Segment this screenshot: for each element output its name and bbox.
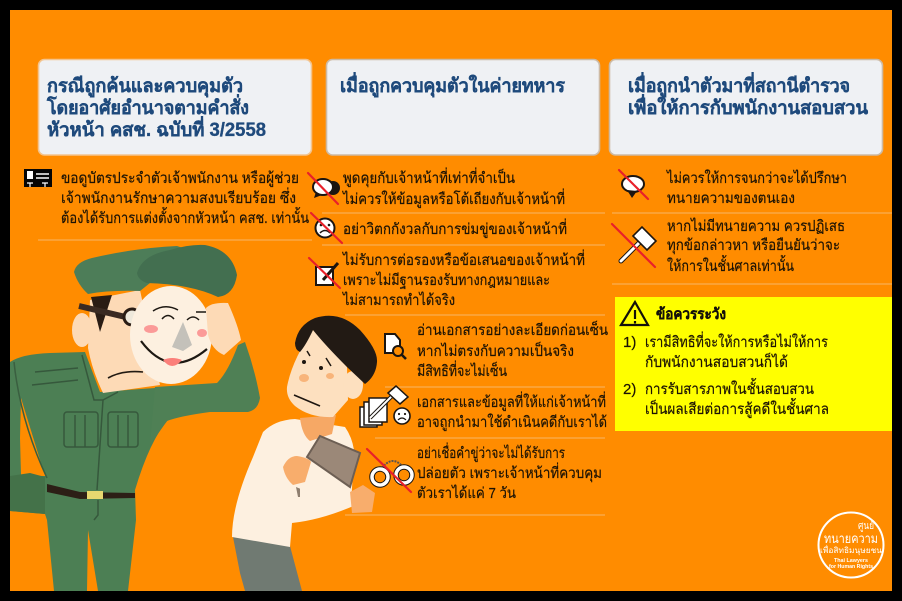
- icon: documents, gavel and sad face: [360, 386, 410, 427]
- text: speak only as necessary: พูดคุยกับเจ้าหน้าที่เท่าที่จำเป็น: [343, 167, 515, 188]
- book: [307, 436, 360, 487]
- caution item one: กับพนักงานสอบสวนก็ได้: [645, 352, 788, 371]
- text: do not worry about threats: อย่าวิตกกังวลกับการข่มขู่ของเจ้าหน้าที่: [343, 218, 567, 238]
- text: no bargaining: เพราะไม่มีฐานรองรับทางกฎหมายและ: [343, 271, 550, 289]
- text: column one item: ขอดูบัตรประจำตัวเจ้าพนักงาน หรือผู้ช่วย: [61, 170, 299, 187]
- text: speak only as necessary: ไม่ควรให้ข้อมูลหรือโต้เถียงกับเจ้าหน้าที่: [342, 188, 565, 208]
- text: do not believe threats of detention: อย่าเชื่อคำขู่ว่าจะไม่ได้รับการ: [417, 442, 565, 462]
- text: do not testify before consulting a lawyer: ไม่ควรให้การจนกว่าจะได้ปรึกษา: [666, 169, 847, 187]
- callout: cautions: [615, 297, 892, 431]
- text: do not testify before consulting a lawyer: ทนายความของตนเอง: [667, 190, 795, 207]
- illustration: soldier holding smiling mask: [10, 245, 260, 591]
- text: deny all charges if no lawyer: ให้การในชั้นศาลเท่านั้น: [667, 255, 794, 275]
- text: deny all charges if no lawyer: [667, 217, 845, 275]
- caution item two: 2): [623, 381, 636, 398]
- text: documents may be used against you: [417, 391, 607, 431]
- text: do not testify before consulting a lawyer: [666, 169, 847, 207]
- man trousers: [233, 537, 302, 591]
- callout heading: ข้อควรระวัง: [656, 306, 726, 323]
- text: read documents carefully: อ่านเอกสารอย่างละเอียดก่อนเซ็น: [417, 320, 608, 339]
- logo: Thai Lawyers for Human Rights: ศูนย์: [858, 520, 874, 532]
- illustration: worried man holding a book: [232, 316, 377, 591]
- caution item one: [623, 331, 828, 371]
- logo: Thai Lawyers for Human Rights: ทนายความ: [824, 531, 878, 546]
- logo: Thai Lawyers for Human Rights: Thai Lawyers: [834, 558, 868, 564]
- icon: crossed out document and pen: [309, 258, 340, 288]
- icon: no talking speech bubbles: [308, 173, 340, 204]
- man forearm: [300, 480, 352, 507]
- man hair: [295, 316, 377, 384]
- man hands: [283, 456, 311, 485]
- heading: กรณีถูกค้นและควบคุมตัว: [47, 75, 243, 98]
- header panel: detained in military camp: [326, 60, 600, 155]
- icon: crossed out sad face: [311, 213, 342, 243]
- soldier body and legs: [10, 352, 168, 591]
- text: deny all charges if no lawyer: หากไม่มีทนายความ ควรปฏิเสธ: [667, 217, 845, 235]
- text: read documents carefully: [417, 320, 608, 380]
- icon: crossed out speech bubble: [619, 170, 648, 199]
- text: no bargaining: ไม่สามารถทำได้จริง: [342, 291, 455, 309]
- icon: crossed out handcuffs: [367, 449, 412, 492]
- soldier caps: [74, 246, 195, 294]
- heading: เมื่อถูกควบคุมตัวในค่ายทหาร: [340, 72, 566, 98]
- soldier head: [88, 290, 160, 393]
- caution item two: [623, 378, 829, 418]
- header panel: search and detention: [38, 60, 312, 155]
- heading: เมื่อถูกนำตัวมาที่สถานีตำรวจ: [628, 72, 850, 98]
- text: read documents carefully: มีสิทธิที่จะไม่เซ็น: [417, 360, 507, 380]
- heading: [46, 75, 266, 141]
- text: no bargaining: ไม่รับการต่อรองหรือข้อเสนอของเจ้าหน้าที่: [342, 249, 585, 269]
- icon: warning triangle: [621, 302, 648, 325]
- heading: เพื่อให้การกับพนักงานสอบสวน: [628, 94, 868, 119]
- soldier raised arm: [150, 342, 260, 445]
- shirt pockets and placket: [32, 355, 138, 520]
- man neck: [300, 415, 336, 441]
- text: read documents carefully: หากไม่ตรงกับความเป็นจริง: [417, 341, 574, 360]
- soldier hand at side: [10, 473, 45, 514]
- man shirt: [232, 419, 354, 547]
- text: speak only as necessary: [342, 167, 565, 208]
- logo: Thai Lawyers for Human Rights: [818, 512, 884, 578]
- text: column one item: [61, 170, 309, 227]
- text: column one item: เจ้าพนักงานรักษาความสงบเรียบร้อย ซึ่ง: [61, 187, 296, 207]
- logo: Thai Lawyers for Human Rights: เพื่อสิทธิมนุษยชน: [820, 544, 883, 555]
- text: column one item: ต้องได้รับการแต่งตั้งจากหัวหน้า คสช. เท่านั้น: [61, 207, 309, 227]
- text: do not believe threats of detention: [417, 442, 602, 502]
- smiling mask: [130, 286, 212, 384]
- caution item one: เรามีสิทธิที่จะให้การหรือไม่ให้การ: [645, 331, 828, 351]
- logo: Thai Lawyers for Human Rights: for Human Rights: [829, 564, 873, 570]
- saluting hand: [206, 303, 241, 355]
- text: deny all charges if no lawyer: ทุกข้อกล่าวหา หรือยืนยันว่าจะ: [667, 237, 840, 255]
- text: documents may be used against you: เอกสารและข้อมูลที่ให้แก่เจ้าหน้าที่: [417, 391, 606, 411]
- icon: document and magnifier: [385, 334, 406, 359]
- caution item two: การรับสารภาพในชั้นสอบสวน: [645, 378, 814, 398]
- text: do not believe threats of detention: ปล่อยตัว เพราะเจ้าหน้าที่ควบคุม: [417, 462, 602, 483]
- caution item one: 1): [623, 334, 636, 351]
- caution item two: เป็นผลเสียต่อการสู้คดีในชั้นศาล: [645, 398, 829, 418]
- belt and buckle: [47, 484, 135, 499]
- text: do not believe threats of detention: ตัวเราได้แค่ 7 วัน: [417, 484, 516, 502]
- man head: [287, 330, 348, 417]
- header panel: at the police station: [610, 60, 882, 155]
- heading: หัวหน้า คสช. ฉบับที่ 3/2558: [47, 116, 266, 141]
- icon: ID card: [24, 169, 52, 187]
- text: documents may be used against you: อาจถูกนำมาใช้ดำเนินคดีกับเราได้: [417, 413, 607, 431]
- icon: crossed out gavel: [612, 224, 656, 267]
- text: no bargaining: [342, 249, 585, 309]
- heading: [628, 72, 868, 119]
- heading: โดยอาศัยอำนาจตามคำสั่ง: [46, 94, 249, 119]
